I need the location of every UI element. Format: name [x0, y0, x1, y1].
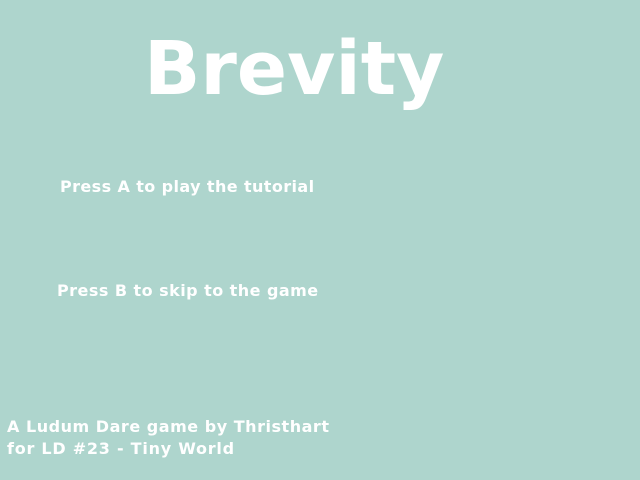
title: Brevity [144, 26, 444, 112]
menu option: skip to game: Press B to skip to the game [57, 281, 319, 300]
credits: A Ludum Dare game by Thristhart [7, 417, 330, 436]
menu option: play tutorial: Press A to play the tutorial [60, 177, 314, 196]
credits: for LD #23 - Tiny World [7, 439, 235, 458]
credits [7, 417, 330, 458]
